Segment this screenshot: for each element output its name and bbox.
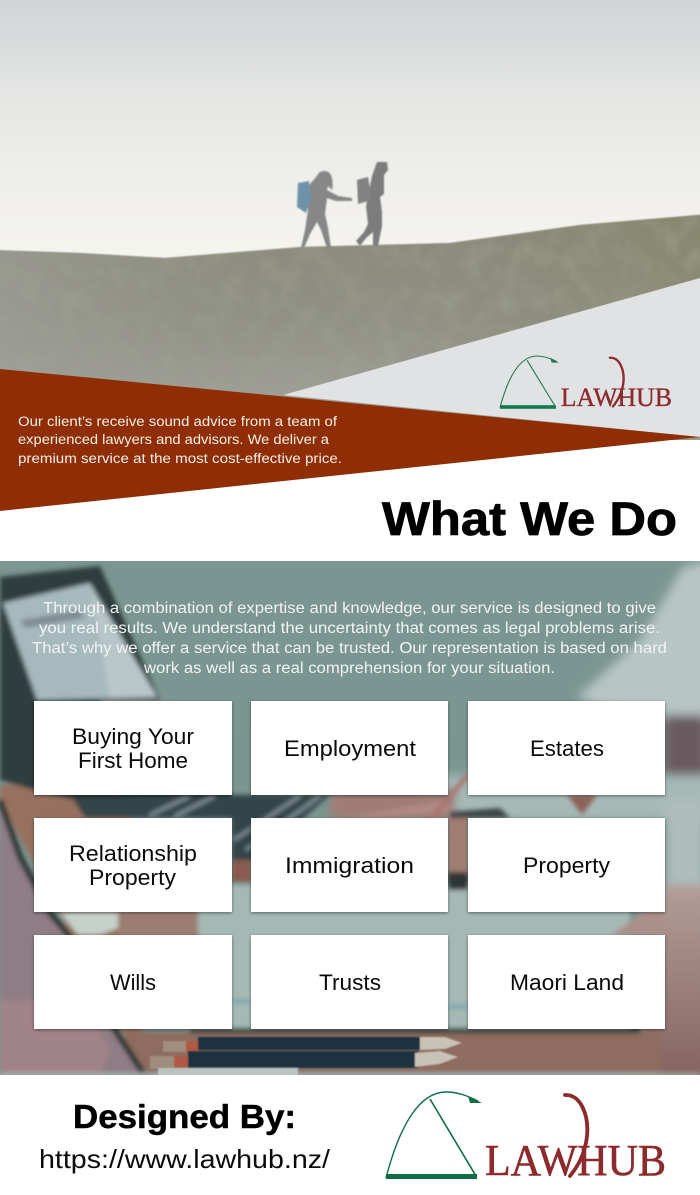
card: Buying Your First Home: First Home: [78, 748, 188, 773]
card: Property: Property: [523, 853, 610, 878]
card: Trusts: Trusts: [319, 970, 381, 995]
gap tones: [448, 818, 468, 872]
card: Buying Your First Home: [34, 701, 232, 795]
laptop body and screen: [0, 566, 232, 800]
mauve left: [0, 805, 143, 1075]
banner text: [18, 414, 342, 466]
card: Estates: [468, 701, 665, 795]
card: Trusts: [251, 935, 448, 1029]
dark diagonal edge: [0, 800, 143, 1073]
logo: Lawhub large: [386, 1092, 666, 1185]
intro paragraph: That’s why we offer a service that can be trusted. Our representation is based on hard: [32, 640, 667, 657]
footer heading: Designed By: Designed By:: [73, 1098, 296, 1135]
card: Maori Land: Maori Land: [510, 970, 624, 995]
card: Relationship Property: Property: [89, 865, 176, 890]
footer URL: https://www.lawhub.nz/: [39, 1144, 331, 1174]
banner text: Our client’s receive sound advice from a team of: [18, 414, 337, 429]
intro paragraph: work as well as a real comprehension for your situation.: [143, 660, 555, 677]
paper: [190, 885, 630, 1030]
grey diagonal panel: [283, 278, 700, 437]
hand and pencil: [357, 802, 450, 818]
banner text: experienced lawyers and advisors. We deliver a: [18, 432, 330, 447]
wood bottom: [125, 1032, 660, 1075]
footer panel: [0, 1075, 700, 1195]
red banner: [0, 369, 700, 511]
wood left: [0, 785, 160, 1075]
logo: Lawhub small: [500, 356, 672, 412]
hero photo: hikers on a hill: [0, 0, 700, 450]
pens: [150, 1037, 462, 1076]
soft tones: [330, 560, 700, 1080]
card: Wills: [34, 935, 232, 1029]
intro paragraph: Through a combination of expertise and knowledge, our service is designed to give: [43, 600, 656, 617]
intro paragraph: [32, 600, 667, 677]
card: Relationship Property: [34, 818, 232, 912]
card: Employment: Employment: [284, 736, 416, 761]
logo: Lawhub small: LAWHUB: [561, 382, 672, 412]
card: Immigration: [251, 818, 448, 912]
card: Property: [468, 818, 665, 912]
heading: What We Do: What We Do: [382, 492, 677, 545]
keyboard: [70, 795, 330, 860]
card: Immigration: Immigration: [285, 853, 414, 878]
card: Wills: Wills: [110, 970, 156, 995]
background photo: desk with laptop and pens: [0, 560, 700, 1080]
card: Relationship Property: Relationship: [69, 841, 197, 866]
icon: hikers silhouette: [297, 162, 388, 248]
card: Estates: Estates: [530, 736, 604, 761]
banner text: premium service at the most cost-effective price.: [18, 451, 342, 466]
intro paragraph: you real results. We understand the uncertainty that comes as legal problems arise.: [39, 620, 660, 637]
mouse: [60, 912, 118, 935]
logo: Lawhub large: LAWHUB: [485, 1136, 666, 1185]
card: Buying Your First Home: Buying Your: [72, 724, 194, 749]
card: Employment: [251, 701, 448, 795]
card: Maori Land: [468, 935, 665, 1029]
